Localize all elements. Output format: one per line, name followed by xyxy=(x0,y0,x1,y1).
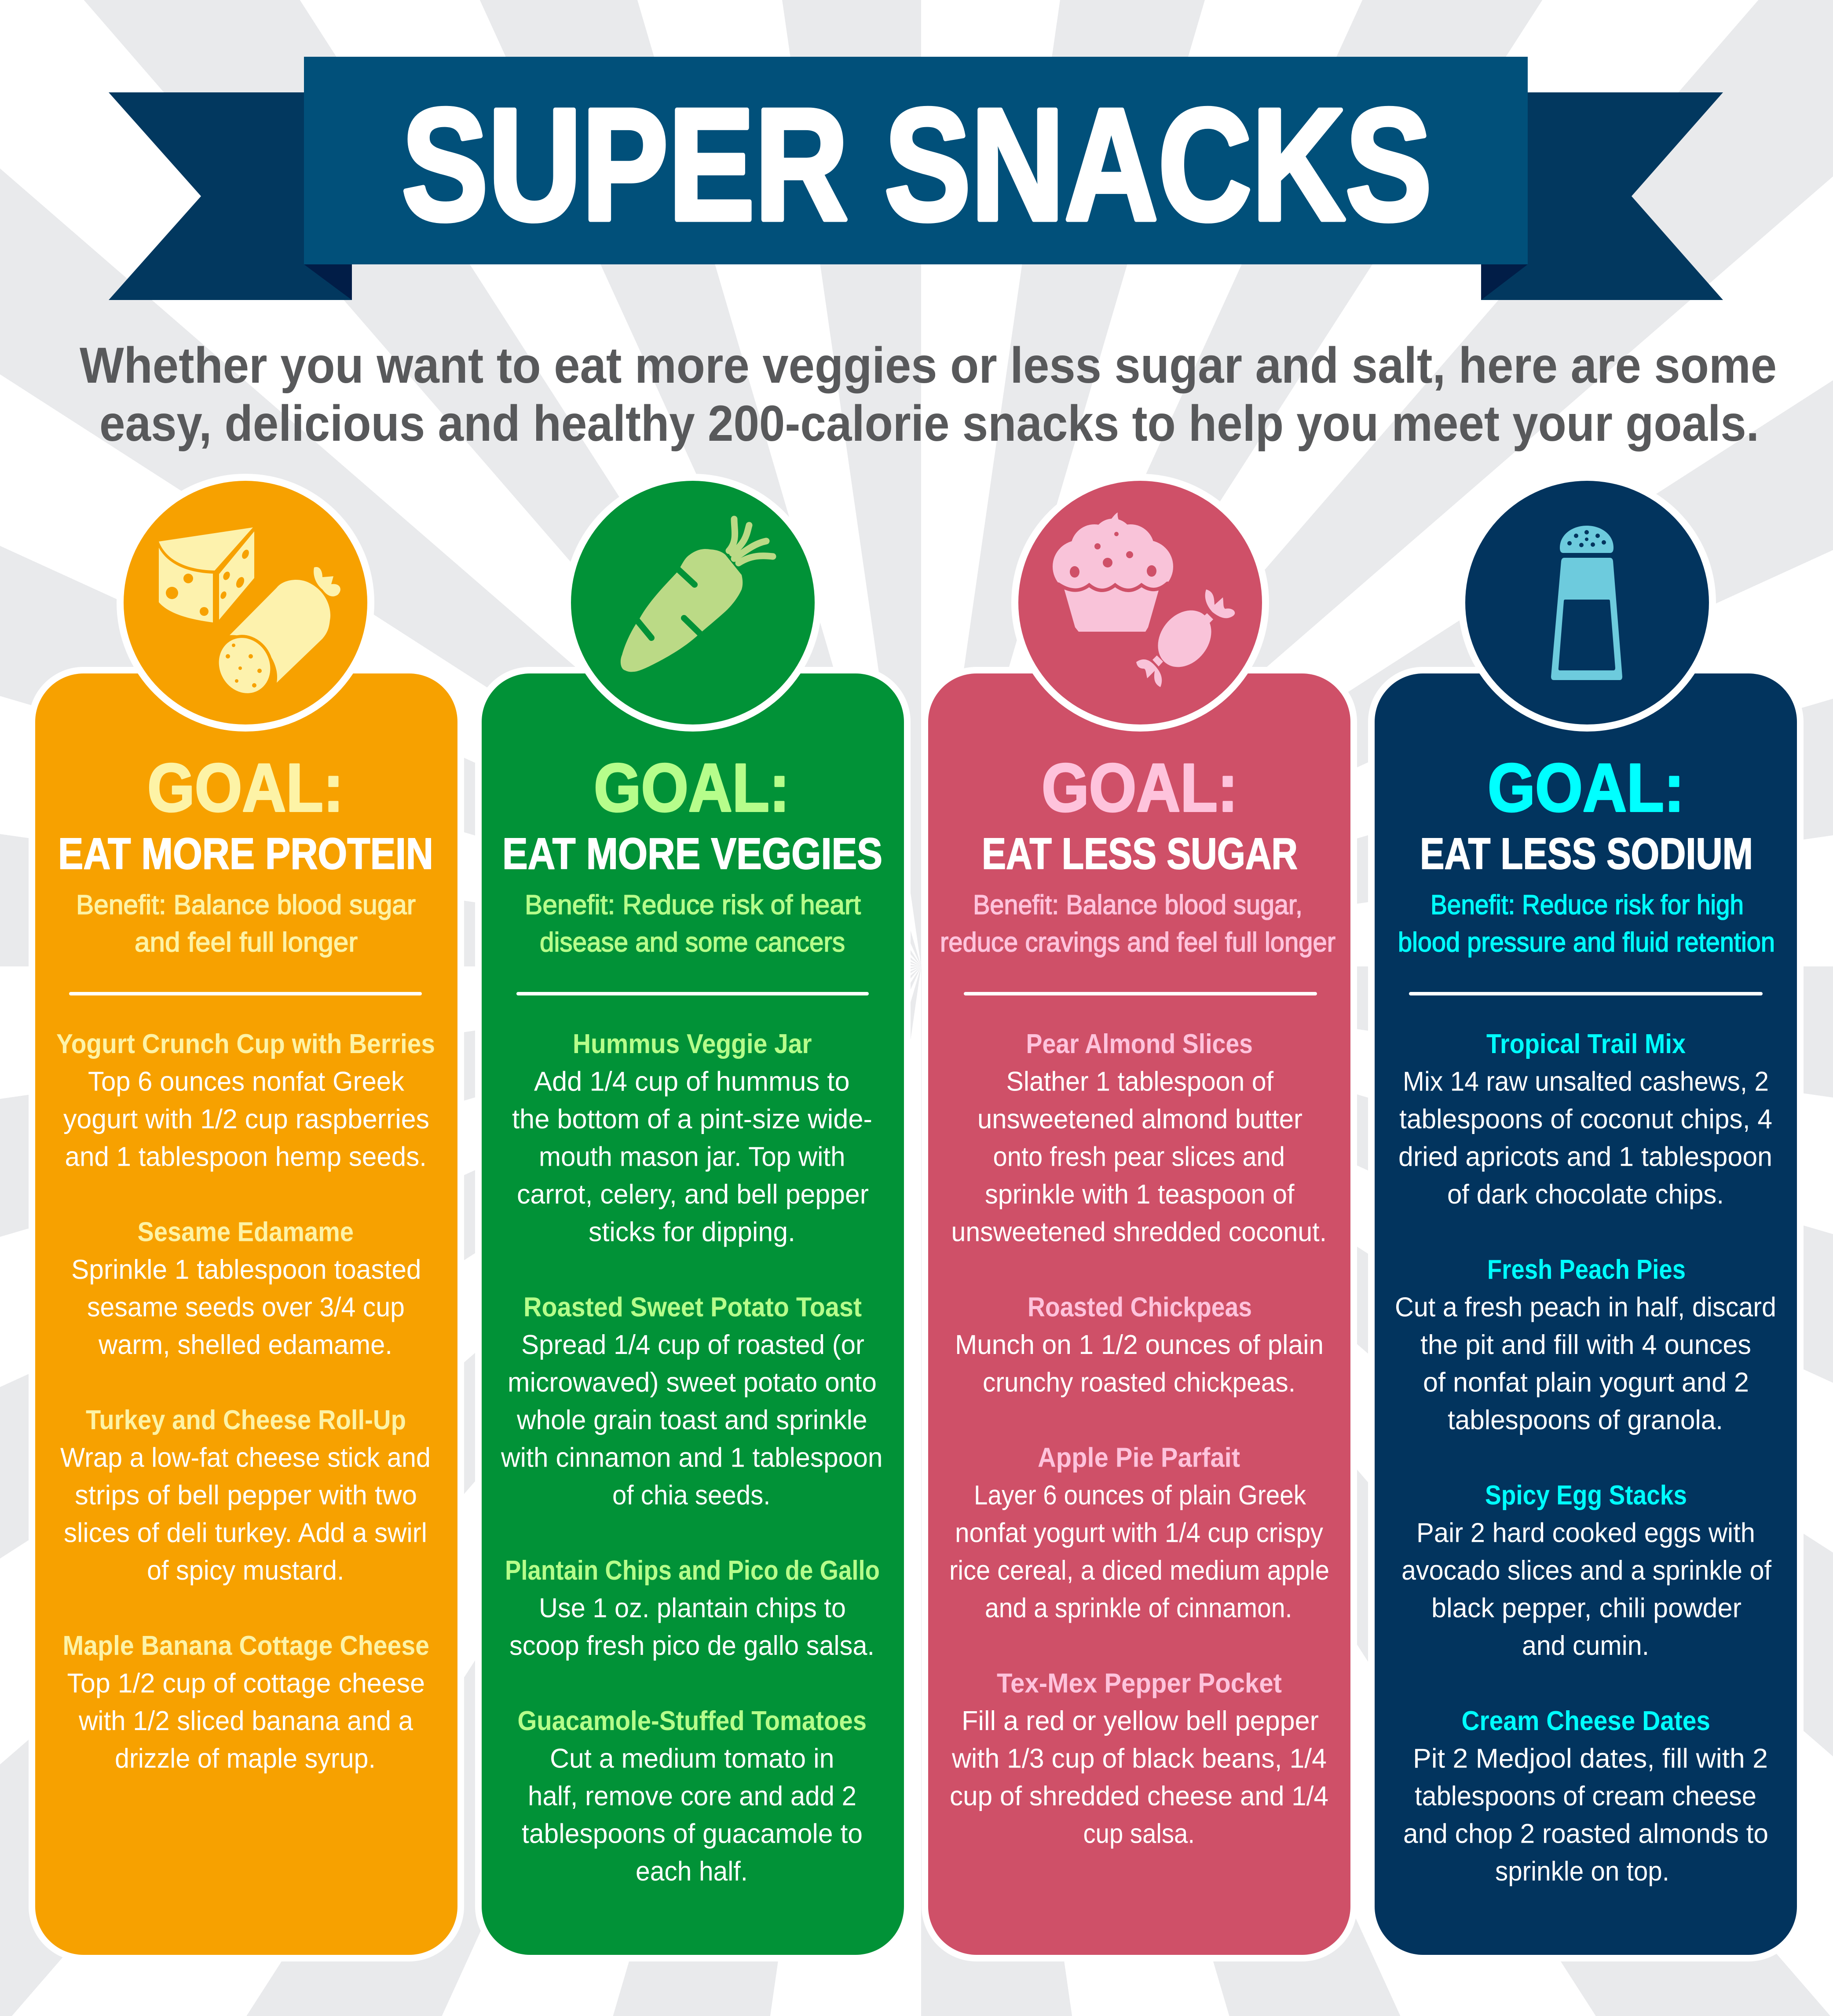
benefit text: Benefit: Reduce risk of heart xyxy=(525,890,861,920)
snack list: Tropical Trail Mix xyxy=(1486,1029,1686,1059)
snack list: Tex-Mex Pepper Pocket xyxy=(997,1668,1282,1699)
snack list: Pair 2 hard cooked eggs with xyxy=(1416,1518,1755,1548)
icon: cupcake xyxy=(1053,512,1173,632)
snack list: with 1/2 sliced banana and a xyxy=(78,1706,413,1736)
snack list: cup salsa. xyxy=(1083,1818,1195,1849)
icon circle xyxy=(1465,481,1709,724)
snack list: Sprinkle 1 tablespoon toasted xyxy=(71,1255,421,1285)
goal heading: GOAL: xyxy=(594,750,790,826)
benefit text xyxy=(525,890,861,958)
goal name: EAT LESS SUGAR xyxy=(982,829,1298,878)
snack list: Sesame Edamame xyxy=(137,1217,354,1248)
snack list xyxy=(501,1029,882,1887)
panel: eat more protein xyxy=(29,474,464,1961)
panel: eat less sodium xyxy=(1368,474,1804,1961)
snack list: and a sprinkle of cinnamon. xyxy=(985,1593,1292,1623)
snack list: the pit and fill with 4 ounces xyxy=(1420,1330,1751,1360)
snack list: whole grain toast and sprinkle xyxy=(516,1405,867,1435)
card body xyxy=(1375,673,1797,1955)
snack list: Slather 1 tablespoon of xyxy=(1006,1066,1274,1097)
snack list: and cumin. xyxy=(1522,1631,1649,1661)
snack list: black pepper, chili powder xyxy=(1431,1593,1742,1623)
goal name: EAT MORE VEGGIES xyxy=(502,829,882,878)
intro text xyxy=(80,337,1777,452)
snack list: microwaved) sweet potato onto xyxy=(508,1367,877,1398)
snack list: Hummus Veggie Jar xyxy=(573,1029,812,1059)
snack list: of chia seeds. xyxy=(612,1480,771,1511)
snack list: and 1 tablespoon hemp seeds. xyxy=(65,1142,427,1172)
snack list: onto fresh pear slices and xyxy=(993,1142,1285,1172)
snack list xyxy=(949,1029,1329,1849)
snack list: with 1/3 cup of black beans, 1/4 xyxy=(951,1744,1327,1774)
snack list: with cinnamon and 1 tablespoon xyxy=(501,1443,882,1473)
snack list: half, remove core and add 2 xyxy=(528,1781,856,1811)
goal name: EAT MORE PROTEIN xyxy=(58,829,433,878)
divider xyxy=(69,992,422,995)
snack list: warm, shelled edamame. xyxy=(98,1330,392,1360)
right ribbon tail xyxy=(1481,92,1723,300)
snack list: of spicy mustard. xyxy=(147,1555,344,1586)
icon circle ring xyxy=(1011,474,1269,732)
benefit text: Benefit: Reduce risk for high xyxy=(1431,890,1744,920)
snack list: Layer 6 ounces of plain Greek xyxy=(974,1480,1306,1511)
snack list: Cream Cheese Dates xyxy=(1461,1706,1710,1736)
snack list: sprinkle on top. xyxy=(1495,1856,1669,1887)
icon circle xyxy=(124,481,367,724)
snack list: avocado slices and a sprinkle of xyxy=(1401,1555,1772,1586)
snack list: unsweetened shredded coconut. xyxy=(951,1217,1327,1248)
panel: eat more veggies xyxy=(475,474,911,1961)
snack list: Cut a medium tomato in xyxy=(550,1744,834,1774)
snack list: scoop fresh pico de gallo salsa. xyxy=(509,1631,874,1661)
benefit text xyxy=(1398,890,1775,958)
goal name: EAT LESS SODIUM xyxy=(1420,829,1753,878)
snack list: rice cereal, a diced medium apple xyxy=(949,1555,1329,1586)
icon circle ring xyxy=(564,474,822,732)
snack list: tablespoons of coconut chips, 4 xyxy=(1399,1104,1772,1134)
benefit text xyxy=(76,890,416,958)
snack list: Top 6 ounces nonfat Greek xyxy=(88,1066,405,1097)
card body xyxy=(482,673,904,1955)
left ribbon fold xyxy=(304,264,352,300)
benefit text: blood pressure and fluid retention xyxy=(1398,927,1775,958)
snack list: cup of shredded cheese and 1/4 xyxy=(950,1781,1328,1811)
snack list: each half. xyxy=(636,1856,748,1887)
goal heading: GOAL: xyxy=(1488,750,1684,826)
snack list: Cut a fresh peach in half, discard xyxy=(1395,1292,1776,1322)
snack list: drizzle of maple syrup. xyxy=(115,1744,376,1774)
card outline xyxy=(1368,667,1804,1961)
snack list: nonfat yogurt with 1/4 cup crispy xyxy=(955,1518,1323,1548)
snack list: tablespoons of granola. xyxy=(1448,1405,1723,1435)
snack list: Munch on 1 1/2 ounces of plain xyxy=(955,1330,1324,1360)
benefit text xyxy=(940,890,1335,958)
snack list: Pit 2 Medjool dates, fill with 2 xyxy=(1413,1744,1768,1774)
snack list: carrot, celery, and bell pepper xyxy=(517,1179,869,1210)
panel: eat less sugar xyxy=(922,474,1357,1961)
snack list: Maple Banana Cottage Cheese xyxy=(62,1631,429,1661)
snack list: Apple Pie Parfait xyxy=(1038,1443,1240,1473)
snack list: Mix 14 raw unsalted cashews, 2 xyxy=(1403,1066,1769,1097)
snack list: sesame seeds over 3/4 cup xyxy=(87,1292,405,1322)
divider xyxy=(1409,992,1763,995)
icon circle ring xyxy=(1458,474,1716,732)
left ribbon tail xyxy=(109,92,352,300)
snack list: tablespoons of guacamole to xyxy=(522,1818,863,1849)
snack list: Plantain Chips and Pico de Gallo xyxy=(505,1555,880,1586)
icon circle xyxy=(571,481,815,724)
card body xyxy=(928,673,1350,1955)
card outline xyxy=(475,667,911,1961)
snack list: mouth mason jar. Top with xyxy=(539,1142,845,1172)
card outline xyxy=(922,667,1357,1961)
benefit text: disease and some cancers xyxy=(540,927,845,958)
right ribbon fold xyxy=(1481,264,1528,300)
card outline xyxy=(29,667,464,1961)
snack list: strips of bell pepper with two xyxy=(75,1480,417,1511)
icon circle xyxy=(1018,481,1262,724)
icon: sausage xyxy=(207,567,340,704)
snack list: tablespoons of cream cheese xyxy=(1415,1781,1756,1811)
snack list: of dark chocolate chips. xyxy=(1447,1179,1724,1210)
benefit text: Benefit: Balance blood sugar, xyxy=(973,890,1302,920)
snack list: Top 1/2 cup of cottage cheese xyxy=(67,1668,425,1699)
title: SUPER SNACKS xyxy=(402,75,1432,253)
icon: cheese xyxy=(159,527,254,622)
snack list: Add 1/4 cup of hummus to xyxy=(534,1066,850,1097)
snack list xyxy=(1395,1029,1776,1887)
snack list xyxy=(56,1029,435,1774)
snack list: Turkey and Cheese Roll-Up xyxy=(86,1405,406,1435)
title banner xyxy=(109,57,1723,300)
divider xyxy=(964,992,1317,995)
banner panel xyxy=(304,57,1528,264)
snack list: slices of deli turkey. Add a swirl xyxy=(64,1518,427,1548)
snack list: the bottom of a pint-size wide- xyxy=(512,1104,872,1134)
snack list: Fresh Peach Pies xyxy=(1487,1255,1686,1285)
divider xyxy=(516,992,869,995)
snack list: sprinkle with 1 teaspoon of xyxy=(985,1179,1295,1210)
snack list: Spicy Egg Stacks xyxy=(1485,1480,1687,1511)
benefit text: Benefit: Balance blood sugar xyxy=(76,890,416,920)
snack list: Guacamole-Stuffed Tomatoes xyxy=(517,1706,867,1736)
snack list: Wrap a low-fat cheese stick and xyxy=(60,1443,431,1473)
goal heading: GOAL: xyxy=(1042,750,1238,826)
icon: salt shaker xyxy=(1551,526,1622,680)
snack list: and chop 2 roasted almonds to xyxy=(1403,1818,1768,1849)
snack list: sticks for dipping. xyxy=(589,1217,795,1248)
icon: candy xyxy=(1136,589,1235,687)
snack list: unsweetened almond butter xyxy=(977,1104,1302,1134)
goal heading: GOAL: xyxy=(147,750,344,826)
benefit text: and feel full longer xyxy=(135,927,358,958)
snack list: Yogurt Crunch Cup with Berries xyxy=(56,1029,435,1059)
card body xyxy=(35,673,457,1955)
icon: carrot xyxy=(621,519,773,672)
snack list: Roasted Sweet Potato Toast xyxy=(523,1292,862,1322)
snack list: crunchy roasted chickpeas. xyxy=(983,1367,1295,1398)
snack list: Pear Almond Slices xyxy=(1026,1029,1253,1059)
snack list: of nonfat plain yogurt and 2 xyxy=(1423,1367,1749,1398)
snack list: Fill a red or yellow bell pepper xyxy=(962,1706,1319,1736)
icon circle ring xyxy=(117,474,374,732)
snack list: Spread 1/4 cup of roasted (or xyxy=(521,1330,864,1360)
snack list: Roasted Chickpeas xyxy=(1028,1292,1252,1322)
snack list: dried apricots and 1 tablespoon xyxy=(1398,1142,1772,1172)
snack list: Use 1 oz. plantain chips to xyxy=(539,1593,846,1623)
benefit text: reduce cravings and feel full longer xyxy=(940,927,1335,958)
snack list: yogurt with 1/2 cup raspberries xyxy=(63,1104,429,1134)
